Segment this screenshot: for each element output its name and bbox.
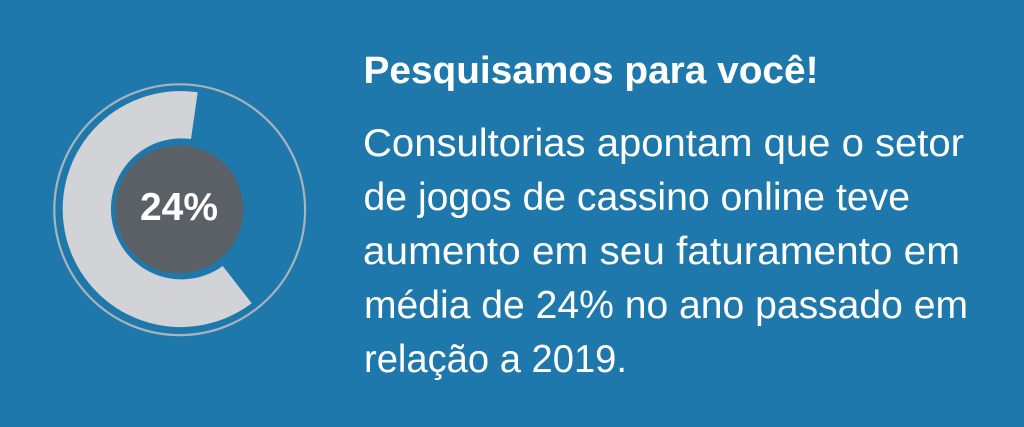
donut chart xyxy=(54,84,305,335)
body text: relação a 2019. xyxy=(364,338,627,381)
center value: 24% xyxy=(140,186,218,229)
center circle xyxy=(115,145,243,273)
body text: Consultorias apontam que o setor xyxy=(363,122,964,165)
outer ring xyxy=(54,84,305,335)
body text xyxy=(363,122,968,381)
heading: Pesquisamos para você! xyxy=(364,50,818,92)
body text: média de 24% no ano passado em xyxy=(364,284,968,327)
body text: aumento em seu faturamento em xyxy=(363,230,960,273)
donut segment xyxy=(63,91,252,327)
body text: de jogos de cassino online teve xyxy=(364,176,910,219)
